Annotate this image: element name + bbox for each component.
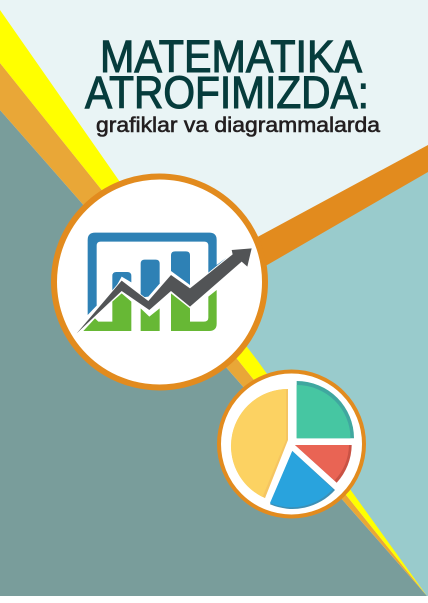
pie slice: blue [270, 451, 335, 509]
badge disc [54, 176, 265, 388]
heading line 2: ATROFIMIZDA: [85, 67, 369, 118]
panel: light teal right area [230, 170, 428, 596]
title [85, 31, 380, 137]
blue frame and bars [88, 233, 227, 315]
circle: growth chart badge [54, 176, 265, 388]
subtitle: grafiklar va diagrammalarda [96, 114, 380, 137]
icon: bar chart with rising arrow [77, 233, 252, 333]
green frame and bars [83, 290, 217, 331]
pie slice: red [295, 445, 352, 483]
pie chart [231, 381, 354, 509]
circle: pie chart badge [219, 372, 364, 516]
pie slice: yellow [231, 389, 288, 498]
rising arrow [77, 248, 252, 333]
heading line 1: MATEMATIKA [100, 31, 362, 82]
pie slice: green [297, 381, 354, 438]
orange band to the right [250, 145, 428, 268]
badge disc [219, 372, 364, 516]
